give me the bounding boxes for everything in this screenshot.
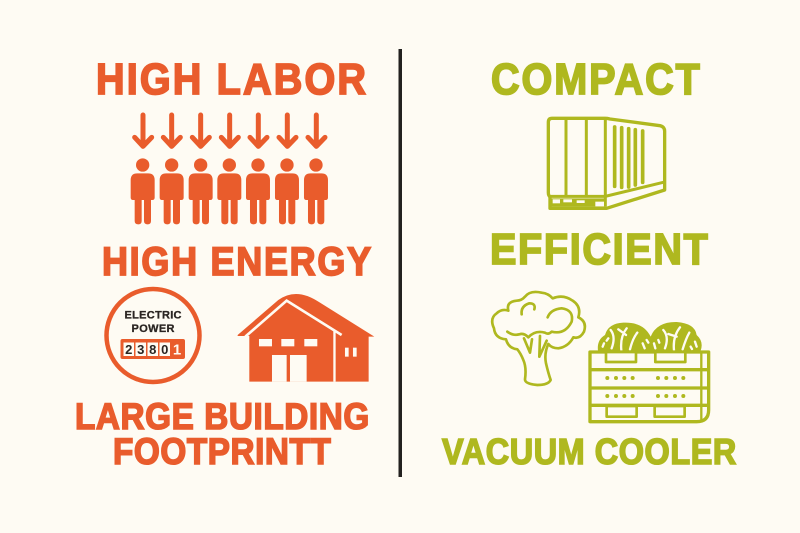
panel: vacuum cooler [442,54,737,472]
icon: electric power meter: 8 [149,342,156,357]
heading: vacuum cooler: VACUUM COOLER [442,432,737,472]
heading: efficient: EFFICIENT [490,224,708,273]
icon: electric power meter: 1 [173,342,181,358]
icon: electric power meter: 0 [161,342,168,357]
icon: arrows pointing down at workers [135,115,325,146]
heading: high labor: HIGH LABOR [96,54,366,103]
icon: electric power meter: 2 [125,342,132,357]
icon: compact cooler container [548,118,665,208]
icon: electric power meter: ELECTRIC [124,310,182,322]
icon: large building [238,294,374,382]
icon: electric power meter: POWER [132,323,175,335]
icon: electric power meter: 3 [137,342,144,357]
divider [398,49,402,477]
icon: produce crate [590,322,709,422]
panel: conventional facility: FOOTPRINTT [113,431,331,472]
icon: electric power meter [106,289,200,382]
heading: large building footprint: LARGE BUILDING [75,396,369,437]
icon: row of workers [131,158,328,224]
heading: compact: COMPACT [491,54,700,103]
heading: high energy: HIGH ENERGY [102,240,371,284]
panel: conventional facility [75,54,374,472]
icon: broccoli [492,292,585,385]
